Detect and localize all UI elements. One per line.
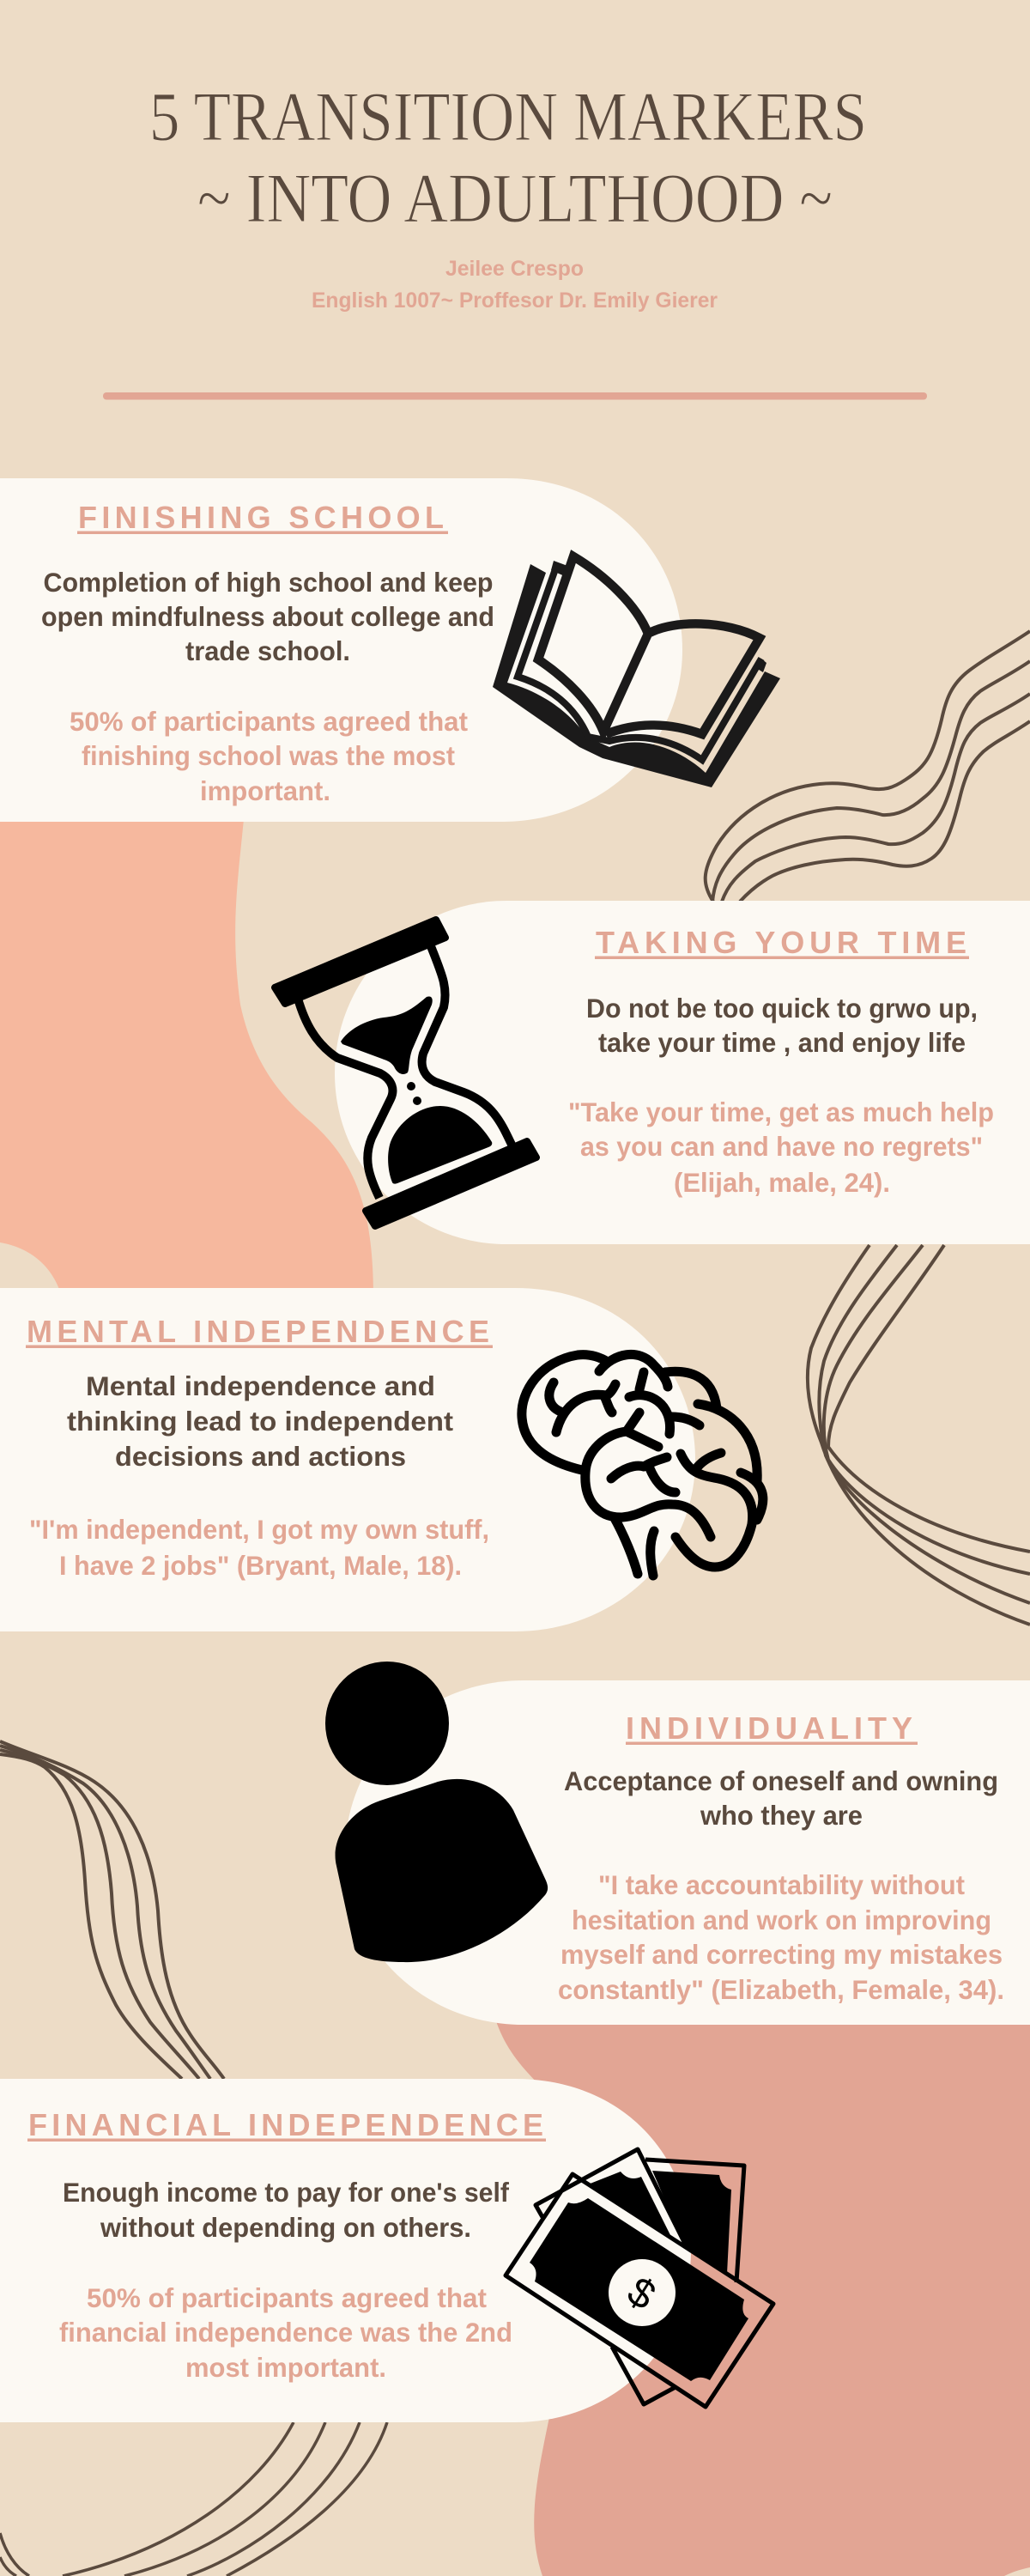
description: finishing school: [41, 567, 494, 666]
salmon background blob: [493, 2009, 1030, 2576]
quote: taking your time: "Take your time, get as much help: [568, 1097, 994, 1127]
icon: open book: [493, 556, 780, 787]
quote: individuality: myself and correcting my mistakes: [560, 1939, 1003, 1970]
author and course subtitle: [312, 257, 718, 313]
statistic: financial independence: [59, 2282, 512, 2383]
author and course subtitle: Jeilee Crespo: [445, 257, 584, 281]
description: individuality: [564, 1765, 998, 1831]
quote: mental independence: I have 2 jobs" (Bryant, Male, 18).: [59, 1550, 462, 1581]
peach background blob: [0, 773, 373, 1297]
statistic: financial independence: 50% of participants agreed that: [87, 2282, 487, 2313]
panel: financial independence: [0, 2079, 691, 2422]
panel: individuality: [345, 1680, 1030, 2025]
description: financial independence: Enough income to pay for one's self: [63, 2177, 509, 2208]
statistic: finishing school: 50% of participants agreed that: [70, 706, 468, 737]
quote: individuality: constantly" (Elizabeth, Female, 34).: [558, 1974, 1004, 2005]
description: finishing school: Completion of high school and keep: [43, 567, 493, 598]
description: finishing school: open mindfulness about college and: [41, 601, 494, 632]
description: mental independence: thinking lead to independent: [67, 1406, 454, 1437]
description: mental independence: [67, 1370, 454, 1472]
description: taking your time: [586, 993, 978, 1058]
description: finishing school: trade school.: [185, 635, 350, 666]
title divider bar: [103, 392, 927, 400]
quote: individuality: "I take accountability without: [598, 1869, 965, 1900]
title: 5 TRANSITION MARKERS: [149, 77, 867, 155]
quote: mental independence: [29, 1514, 489, 1581]
heading: financial independence: FINANCIAL INDEPENDENCE: [28, 2107, 543, 2142]
description: mental independence: decisions and actions: [115, 1441, 406, 1472]
panel: finishing school: [0, 478, 682, 822]
statistic: finishing school: important.: [200, 775, 330, 806]
icon: hourglass: [275, 920, 536, 1226]
quote: individuality: hesitation and work on improving: [572, 1905, 991, 1935]
title: [149, 77, 867, 237]
statistic: finishing school: [70, 706, 468, 806]
icon: person: [325, 1662, 548, 1962]
description: individuality: Acceptance of oneself and owning: [564, 1765, 998, 1796]
quote: individuality: [558, 1869, 1004, 2005]
quote: taking your time: [568, 1097, 994, 1198]
quote: taking your time: (Elijah, male, 24).: [674, 1167, 890, 1198]
statistic: finishing school: finishing school was the most: [82, 740, 455, 771]
statistic: financial independence: financial independence was the 2nd: [59, 2317, 512, 2348]
quote: mental independence: "I'm independent, I got my own stuff,: [29, 1514, 489, 1545]
heading: finishing school: FINISHING SCHOOL: [78, 500, 444, 535]
decorative wavy lines: left: [0, 1741, 224, 2079]
icon: banknotes with dollar sign: $: [620, 2269, 663, 2319]
decorative wavy lines: bottom: [0, 2422, 387, 2576]
heading: mental independence: MENTAL INDEPENDENCE: [27, 1314, 489, 1349]
author and course subtitle: English 1007~ Proffesor Dr. Emily Gierer: [312, 289, 718, 313]
description: individuality: who they are: [700, 1800, 863, 1831]
description: mental independence: Mental independence and: [86, 1370, 435, 1401]
panel: taking your time: [335, 901, 1030, 1244]
description: financial independence: without depending on others.: [100, 2212, 471, 2243]
statistic: financial independence: most important.: [185, 2352, 386, 2383]
icon: brain: [522, 1354, 763, 1576]
description: taking your time: take your time , and enjoy life: [598, 1027, 966, 1058]
icon: banknotes with dollar sign: [506, 2149, 773, 2407]
panel: mental independence: [0, 1288, 695, 1631]
description: financial independence: [63, 2177, 509, 2243]
decorative wavy lines: middle right: [808, 1245, 1030, 1625]
heading: individuality: INDIVIDUALITY: [626, 1710, 912, 1746]
title: ~ INTO ADULTHOOD ~: [197, 159, 833, 237]
quote: taking your time: as you can and have no regrets": [580, 1131, 983, 1162]
heading: taking your time: TAKING YOUR TIME: [596, 925, 966, 960]
decorative wavy lines: top right: [706, 631, 1030, 902]
description: taking your time: Do not be too quick to grwo up,: [586, 993, 978, 1024]
